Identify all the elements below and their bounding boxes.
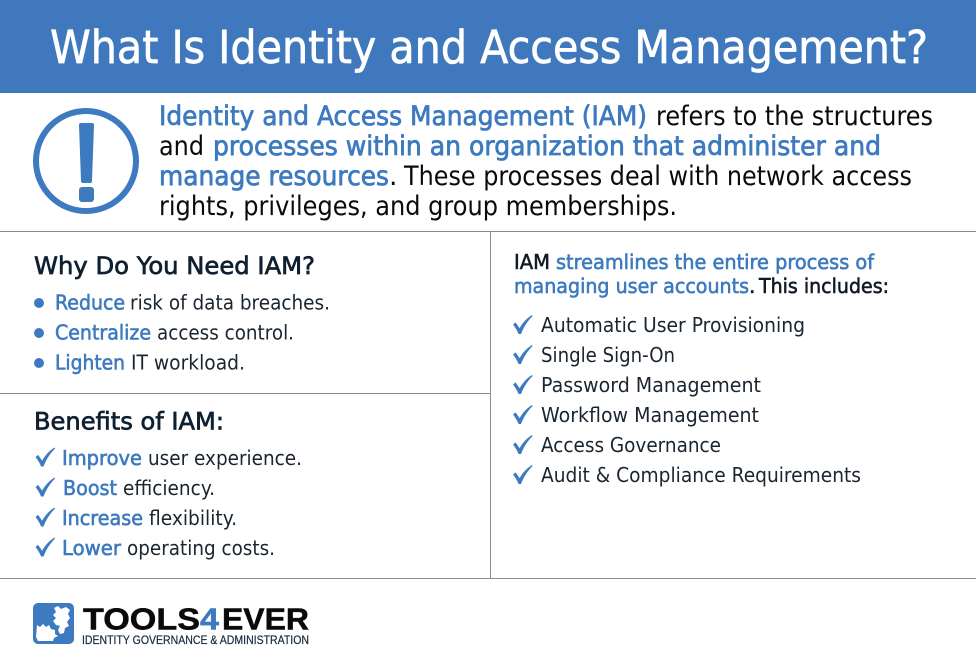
intro paragraph: refers to the structures xyxy=(656,101,933,132)
list: included processes: Single Sign-On xyxy=(541,343,675,367)
intro paragraph: . xyxy=(389,161,397,192)
wordmark: TOOLS xyxy=(83,602,200,636)
lead text xyxy=(514,250,889,298)
list: benefits: efficiency. xyxy=(123,476,215,500)
heading: benefits of IAM: Benefits of IAM: xyxy=(34,408,224,436)
tagline: IDENTITY GOVERNANCE & ADMINISTRATION xyxy=(82,633,309,647)
logo: Tools4ever xyxy=(33,602,309,647)
intro paragraph: Identity and Access Management (IAM) xyxy=(159,101,647,132)
list: benefits: Increase xyxy=(62,506,143,530)
lead text: IAM xyxy=(514,250,550,274)
list: reasons: access control. xyxy=(157,320,294,344)
header banner xyxy=(0,0,976,93)
lead text: managing user accounts xyxy=(514,274,749,298)
list: benefits: operating costs. xyxy=(127,536,275,560)
list: included processes: Access Governance xyxy=(541,433,721,457)
list: included processes xyxy=(513,313,861,487)
list: included processes: Audit & Compliance Requirements xyxy=(541,463,861,487)
heading: why do you need IAM: Why Do You Need IAM? xyxy=(34,252,315,280)
intro paragraph: and xyxy=(159,131,204,162)
panel: benefits of IAM xyxy=(34,408,302,560)
list: benefits xyxy=(36,446,302,560)
lead text: . xyxy=(749,274,755,298)
list: included processes: Automatic User Provisioning xyxy=(541,313,805,337)
intro paragraph: manage resources xyxy=(159,161,389,192)
list: benefits: flexibility. xyxy=(149,506,237,530)
logo: Tools4ever: 4 xyxy=(200,602,220,636)
lead text: streamlines the entire process of xyxy=(556,250,875,274)
list: reasons xyxy=(34,290,330,374)
list: reasons: IT workload. xyxy=(131,350,245,374)
icon: logo gear square xyxy=(33,603,74,644)
lead text: This includes: xyxy=(758,274,889,298)
list: benefits: Boost xyxy=(63,476,117,500)
panel: streamlining user accounts xyxy=(513,250,889,487)
list: reasons: Lighten xyxy=(55,350,125,374)
intro paragraph xyxy=(159,101,933,222)
list: reasons: Centralize xyxy=(55,320,151,344)
list: benefits: user experience. xyxy=(148,446,302,470)
list: reasons: risk of data breaches. xyxy=(130,290,330,314)
list: included processes: Workflow Management xyxy=(541,403,759,427)
list: benefits: Lower xyxy=(62,536,122,560)
intro paragraph: rights, privileges, and group memberships. xyxy=(159,191,677,222)
list: benefits: Improve xyxy=(62,446,142,470)
list: reasons: Reduce xyxy=(55,290,125,314)
panel: why do you need IAM xyxy=(34,252,330,374)
list: included processes: Password Management xyxy=(541,373,761,397)
logo: Tools4ever: EVER xyxy=(222,602,309,636)
icon: exclamation mark in circle xyxy=(36,111,136,211)
intro paragraph: processes within an organization that administer and xyxy=(213,131,881,162)
intro paragraph: These processes deal with network access xyxy=(403,161,912,192)
